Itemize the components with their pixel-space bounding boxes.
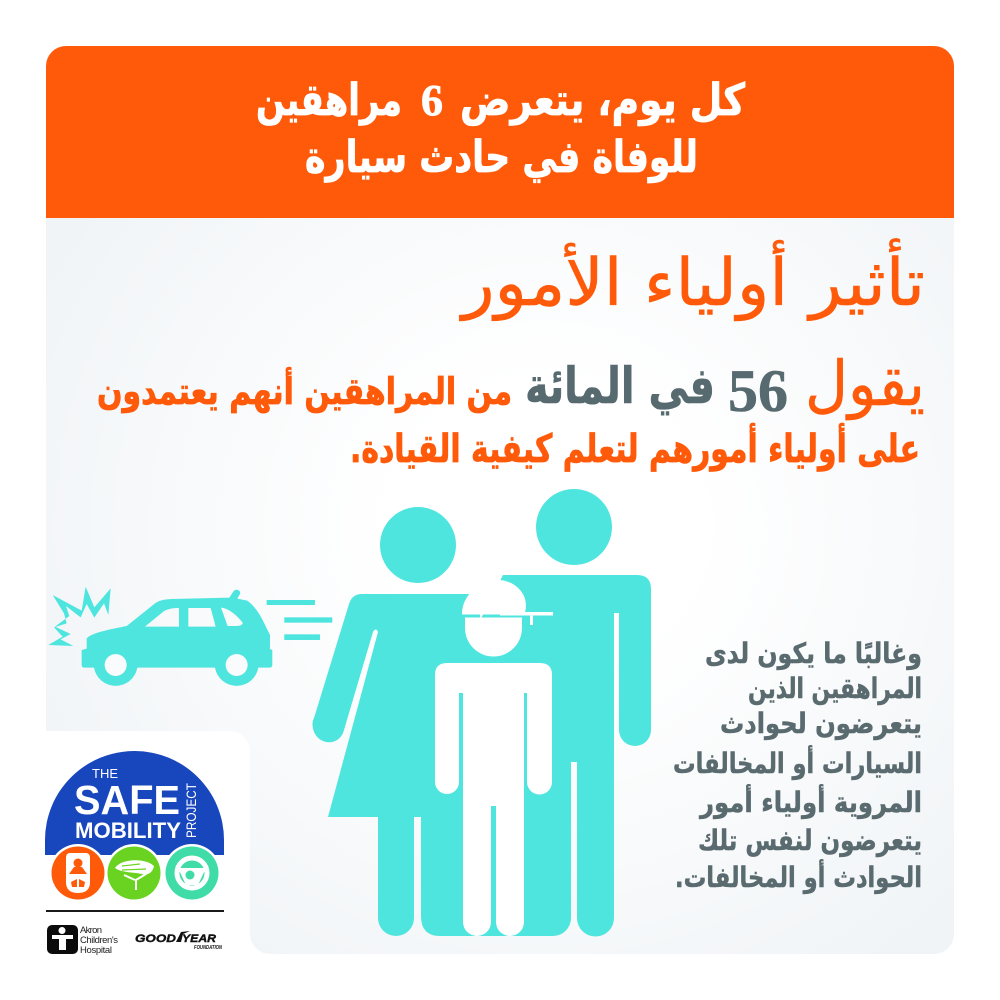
icon: car seat <box>49 844 107 902</box>
logo: Goodyear Foundation: GOOD <box>135 933 176 945</box>
logo: Safe Mobility semicircle: MOBILITY <box>75 818 181 843</box>
icon: steering wheel <box>163 844 221 902</box>
logo: Goodyear Foundation: FOUNDATION <box>194 945 222 951</box>
header line 1 <box>256 75 745 126</box>
text block: paragraph: يتعرضون لحوادث <box>720 707 922 740</box>
logo: Akron Children's Hospital: Children's <box>80 935 118 946</box>
figure: child <box>435 580 553 936</box>
words: of teens rely: من المراهقين أنهم يعتمدون <box>97 367 512 413</box>
text block: paragraph: وغالبًا ما يكون لدى <box>705 637 922 670</box>
statistic text block <box>97 347 925 472</box>
text block: paragraph: السيارات أو المخالفات <box>673 745 922 780</box>
header banner <box>46 46 954 218</box>
logo: Goodyear Foundation <box>135 931 222 951</box>
icon: bike helmet <box>105 844 163 902</box>
crash spark <box>48 587 111 646</box>
text block: paragraph: المراهقين الذين <box>748 672 922 705</box>
title: تأثير أولياء الأمور <box>459 238 925 321</box>
text block: paragraph: المروية أولياء أمور <box>698 784 922 819</box>
logo: Akron Children's Hospital: Hospital <box>80 945 112 956</box>
logo: Goodyear Foundation: YEAR <box>182 933 216 945</box>
wheels <box>105 654 127 676</box>
divider line <box>46 910 224 912</box>
text block: paragraph: الحوادث أو المخالفات. <box>675 859 922 894</box>
words: percent: في المائة <box>525 357 715 415</box>
figure: woman <box>312 507 480 936</box>
logo: Safe Mobility semicircle: THE <box>92 766 118 781</box>
logo: Safe Mobility semicircle <box>45 751 224 855</box>
child cap <box>462 580 553 625</box>
number: 56: 56 <box>728 358 788 424</box>
logo: Safe Mobility semicircle: PROJECT <box>184 783 199 838</box>
icon: crashed car <box>48 587 332 686</box>
panel: logo area <box>0 731 270 1000</box>
icon: family figures <box>312 489 651 937</box>
child face <box>465 618 522 656</box>
panel: main card background <box>46 100 954 954</box>
logo: Safe Mobility semicircle: SAFE <box>74 777 180 823</box>
car body <box>82 590 272 686</box>
logo: Akron Children's Hospital: Akron <box>80 925 102 936</box>
header line 2: للوفاة في حادث سيارة <box>305 132 698 183</box>
text block: paragraph <box>673 637 922 894</box>
speed lines <box>267 600 315 605</box>
text block: paragraph: يتعرضون لنفس تلك <box>698 824 922 857</box>
figure: man <box>470 489 651 937</box>
word: says: يقول <box>805 347 925 420</box>
header line 1: 6 <box>421 76 443 125</box>
header line 1: كل يوم، يتعرض <box>460 75 745 126</box>
logo: Akron Children's Hospital <box>47 925 118 956</box>
child body <box>435 663 552 936</box>
header line 1: مراهقين <box>256 75 402 126</box>
